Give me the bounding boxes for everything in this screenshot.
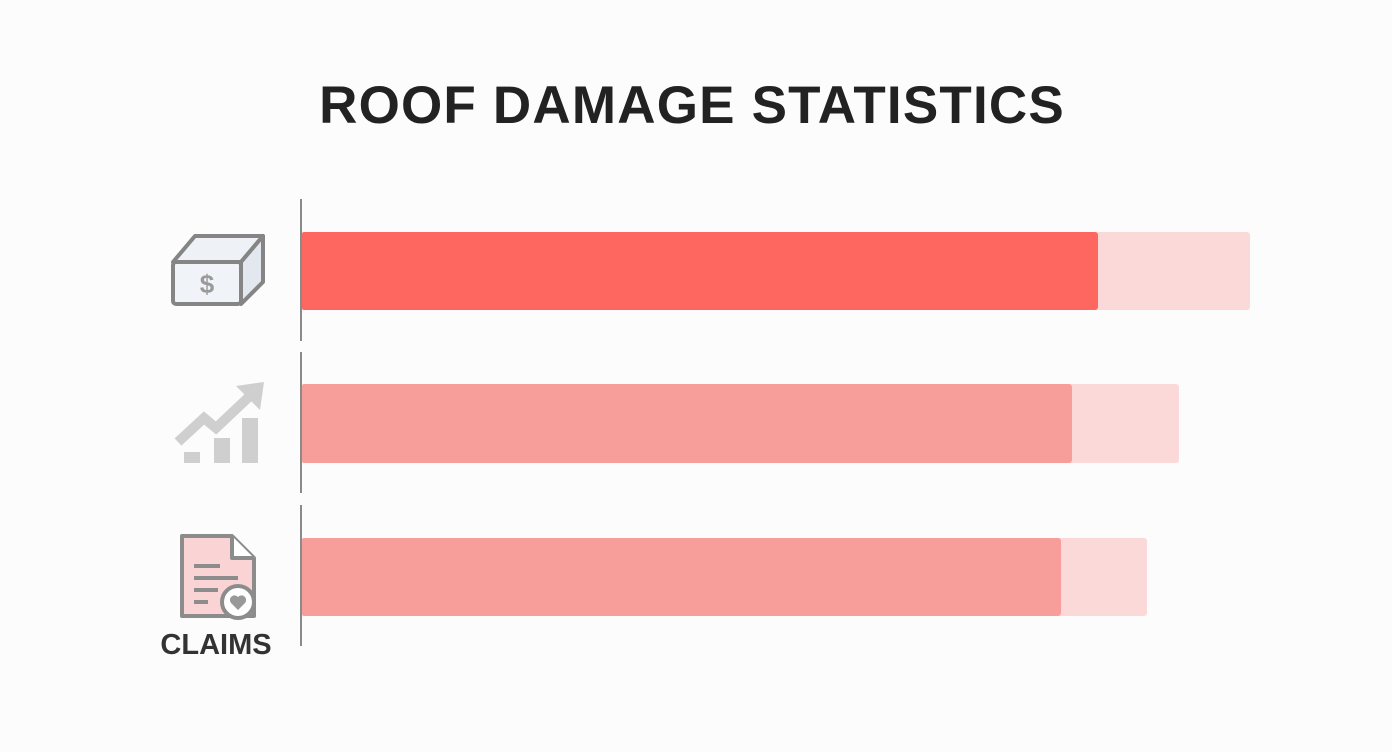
bar 3 [302,538,1061,616]
icon: claim document [180,534,256,620]
row 2: trend [174,382,264,463]
icon: money box [171,234,265,306]
row 3: claims [160,534,272,661]
label: claims: CLAIMS [160,629,272,661]
title: ROOF DAMAGE STATISTICS [319,76,1065,135]
row 1: cost [171,234,265,306]
bar 1 [302,232,1098,310]
icon: trend up [174,382,264,463]
bar 2 [302,384,1072,463]
icon: money box: $ [200,269,215,299]
